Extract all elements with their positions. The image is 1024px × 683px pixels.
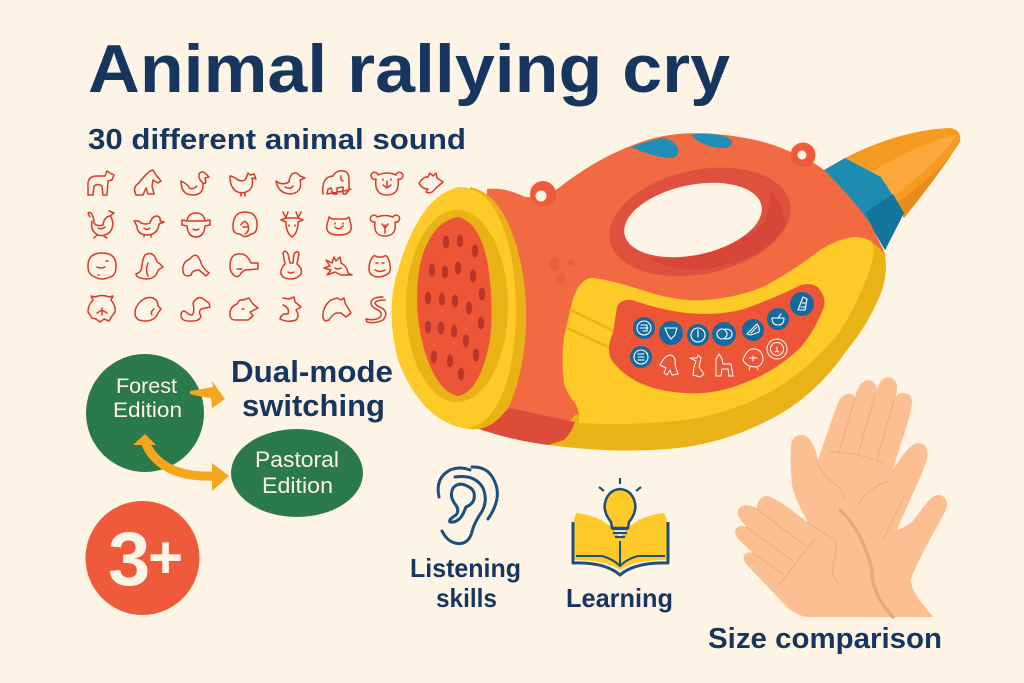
- icon: rabbit: [281, 251, 302, 279]
- icon: bear cub: [370, 215, 400, 236]
- button 7: [790, 292, 814, 316]
- icon: open book with light bulb: [573, 478, 668, 575]
- outline: lion: [767, 339, 787, 359]
- button 4: [712, 322, 736, 346]
- pastoral edition ellipse: Pastoral: [255, 447, 339, 472]
- mode diagram: forest and pastoral editions: [86, 354, 393, 517]
- icon: goose: [134, 216, 164, 237]
- text: listening skills: [410, 553, 521, 613]
- button 3: [687, 324, 709, 346]
- subtitle: 30 different animal sound: 30 different animal sound: [88, 124, 466, 156]
- icon: seal: [183, 255, 209, 276]
- lower hand: [735, 496, 895, 617]
- toy speaker holes: [425, 234, 485, 380]
- toy freckles: [549, 257, 574, 285]
- icon: tiger: [88, 296, 115, 322]
- icon: chick: [276, 173, 305, 194]
- forest edition circle: Edition: [113, 399, 182, 422]
- toy hanging loop: top right: [790, 142, 816, 168]
- learning: [566, 478, 673, 613]
- icon: ape: [233, 212, 257, 236]
- toy hanging loop: top left: [530, 181, 556, 207]
- toy panel grooves: [567, 310, 614, 348]
- icon: elephant: [323, 171, 351, 194]
- heading: dual-mode switching: Dual-mode: [231, 354, 393, 389]
- icon: duck: [181, 172, 209, 195]
- toy nozzle: blue band: [824, 158, 904, 250]
- icon: deer: [281, 212, 303, 237]
- toy nozzle: orange tip: [845, 128, 960, 218]
- icon: rooster: [88, 211, 114, 238]
- toy handle ring: [599, 152, 801, 292]
- pastoral edition ellipse: Edition: [262, 473, 333, 498]
- forest edition circle: Forest: [116, 375, 177, 398]
- toy lower yellow shell: [548, 242, 886, 451]
- heading: dual-mode switching: [231, 354, 393, 423]
- icon: hippo: [327, 217, 351, 235]
- icon: ear: [438, 467, 497, 544]
- toy: animal sound horn: [392, 128, 960, 451]
- icon: tapir: [230, 254, 258, 277]
- toy front rim: [392, 187, 526, 429]
- button 6: [767, 308, 789, 330]
- title: Animal rallying cry: [88, 31, 730, 107]
- icon: cow: [419, 173, 443, 193]
- button 8: [630, 346, 652, 368]
- icon: kangaroo: [280, 297, 301, 321]
- outline: dog: [660, 355, 678, 375]
- icon: fox: [324, 257, 352, 275]
- icon: goat: [88, 171, 114, 195]
- icon: sheep: [182, 213, 210, 237]
- icon: platypus: [181, 298, 210, 321]
- icon: hamster: [135, 298, 161, 321]
- button 5: [742, 319, 764, 341]
- icon: penguin: [136, 253, 163, 279]
- icon: anteater: [323, 298, 351, 321]
- age badge: 3+: +: [148, 524, 183, 591]
- toy rim inner shadow: [406, 210, 508, 402]
- toy blue stripes: [631, 134, 732, 158]
- icon: hen: [230, 173, 256, 196]
- toy white animal outlines: [660, 339, 787, 377]
- hand crease lines: [746, 395, 905, 617]
- text: listening skills: skills: [436, 583, 497, 613]
- listening skills: [410, 467, 521, 613]
- forest edition circle: [86, 354, 204, 472]
- outline: monkey: [743, 349, 763, 370]
- animal sound icon grid: [88, 170, 443, 323]
- age badge: 3+: [86, 501, 200, 615]
- text: listening skills: Listening: [410, 553, 521, 583]
- arrow: forest to dual-mode: [190, 381, 225, 408]
- icon: frog: [369, 256, 390, 277]
- text: size comparison: Size comparison: [708, 623, 942, 655]
- outline: llama: [716, 354, 733, 376]
- toy yellow panel: [562, 237, 874, 424]
- toy red base: [476, 408, 575, 445]
- size comparison: [708, 377, 947, 655]
- pastoral edition ellipse: [231, 429, 363, 517]
- heading: dual-mode switching: switching: [242, 388, 385, 423]
- icon: monkey: [88, 253, 116, 279]
- toy speaker face: [417, 217, 492, 396]
- illustration: two hands: [735, 377, 947, 617]
- button 2: [659, 321, 683, 345]
- upper hand: [791, 377, 947, 617]
- toy blue sound buttons: [630, 292, 814, 368]
- arrow: forest to pastoral two-way: [133, 434, 229, 491]
- icon: beaver: [230, 298, 258, 320]
- text: learning: Learning: [566, 583, 673, 613]
- outline: giraffe: [690, 355, 704, 377]
- age badge: 3+: 3: [108, 517, 150, 602]
- icon: snake: [366, 297, 386, 323]
- button 1: [633, 317, 655, 339]
- icon: bear: [371, 172, 403, 195]
- icon: horse: [135, 170, 161, 195]
- toy red button panel: [609, 284, 824, 393]
- toy orange body: [476, 133, 885, 440]
